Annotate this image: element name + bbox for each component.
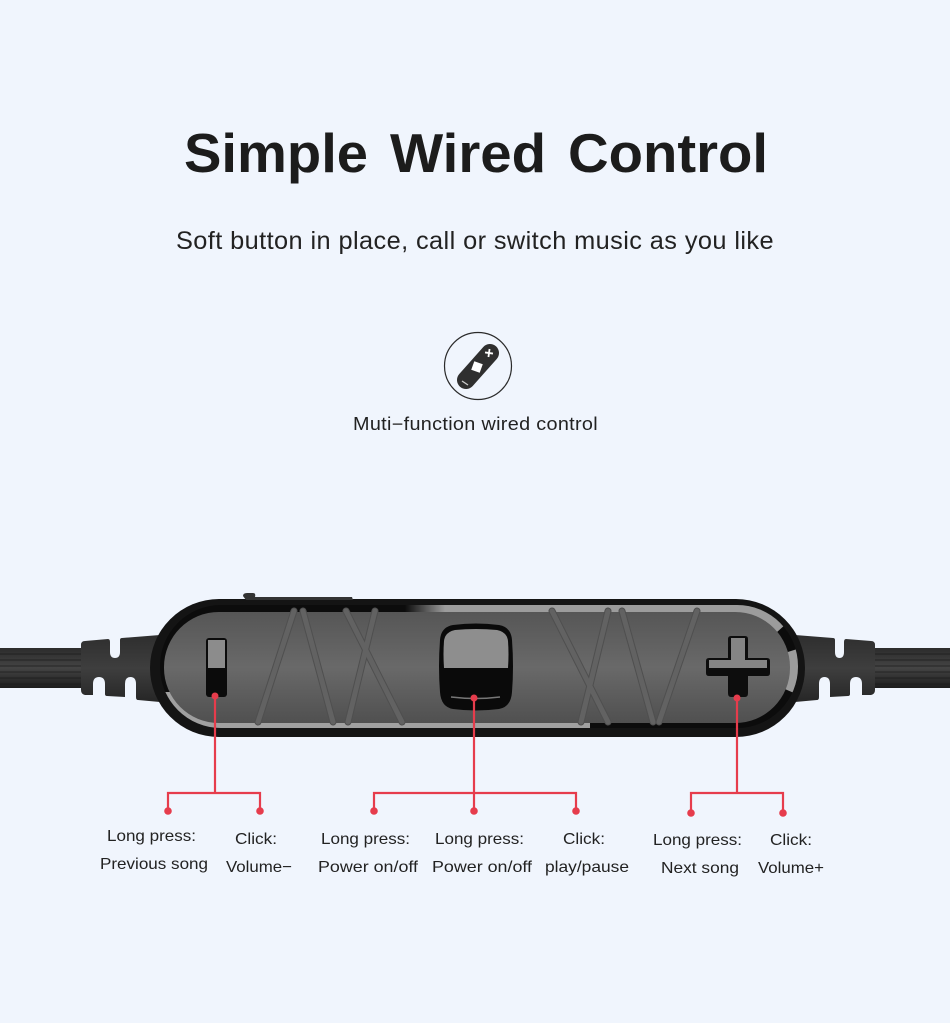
top tab bbox=[243, 593, 353, 600]
inner rim dark bbox=[160, 605, 798, 728]
icon caption: Muti−function wired control bbox=[353, 414, 598, 434]
left button bbox=[206, 638, 227, 697]
right strain relief bbox=[795, 635, 875, 702]
icon: wired control bbox=[444, 332, 512, 400]
title: Wired bbox=[390, 122, 546, 184]
label: power on/off 1: Long press: bbox=[321, 831, 410, 848]
title: Control bbox=[568, 122, 768, 184]
label: next song: Next song bbox=[661, 860, 739, 877]
label: volume minus bbox=[226, 831, 292, 876]
label: next song bbox=[653, 832, 742, 877]
left cable bbox=[0, 648, 84, 688]
label: next song: Long press: bbox=[653, 832, 742, 849]
label: previous song: Long press: bbox=[107, 828, 196, 845]
top and right rim highlight bbox=[408, 605, 798, 692]
face panel bbox=[164, 612, 790, 723]
left strain relief bbox=[81, 635, 160, 702]
right cable bbox=[870, 648, 950, 688]
label: volume plus: Volume+ bbox=[758, 860, 824, 877]
center button bbox=[439, 624, 513, 710]
ridge shadows bbox=[258, 611, 697, 722]
label: power on/off 1: Power on/off bbox=[318, 859, 419, 876]
label: play/pause bbox=[545, 831, 629, 876]
wired control device bbox=[0, 593, 950, 737]
label: volume minus: Click: bbox=[235, 831, 277, 848]
callout: plus button bbox=[687, 694, 787, 817]
label: volume plus bbox=[758, 832, 824, 877]
label: power on/off 2: Power on/off bbox=[432, 859, 533, 876]
label: power on/off 2: Long press: bbox=[435, 831, 524, 848]
label: previous song: Previous song bbox=[100, 856, 208, 873]
bottom rim highlight bbox=[165, 692, 590, 728]
plus button bbox=[706, 636, 770, 697]
label: previous song bbox=[100, 828, 208, 873]
label: volume minus: Volume− bbox=[226, 859, 292, 876]
callout: left button bbox=[164, 692, 264, 815]
title bbox=[184, 122, 768, 184]
label: play/pause: Click: bbox=[563, 831, 605, 848]
label: power on/off 2 bbox=[432, 831, 533, 876]
label: power on/off 1 bbox=[318, 831, 419, 876]
body shell bbox=[150, 599, 805, 737]
ridges bbox=[258, 611, 697, 722]
subtitle: Soft button in place, call or switch music as you like bbox=[176, 227, 774, 255]
label: volume plus: Click: bbox=[770, 832, 812, 849]
callout: center button bbox=[370, 694, 580, 815]
label: play/pause: play/pause bbox=[545, 859, 629, 876]
title: Simple bbox=[184, 122, 368, 184]
ridge tops bbox=[258, 611, 697, 722]
